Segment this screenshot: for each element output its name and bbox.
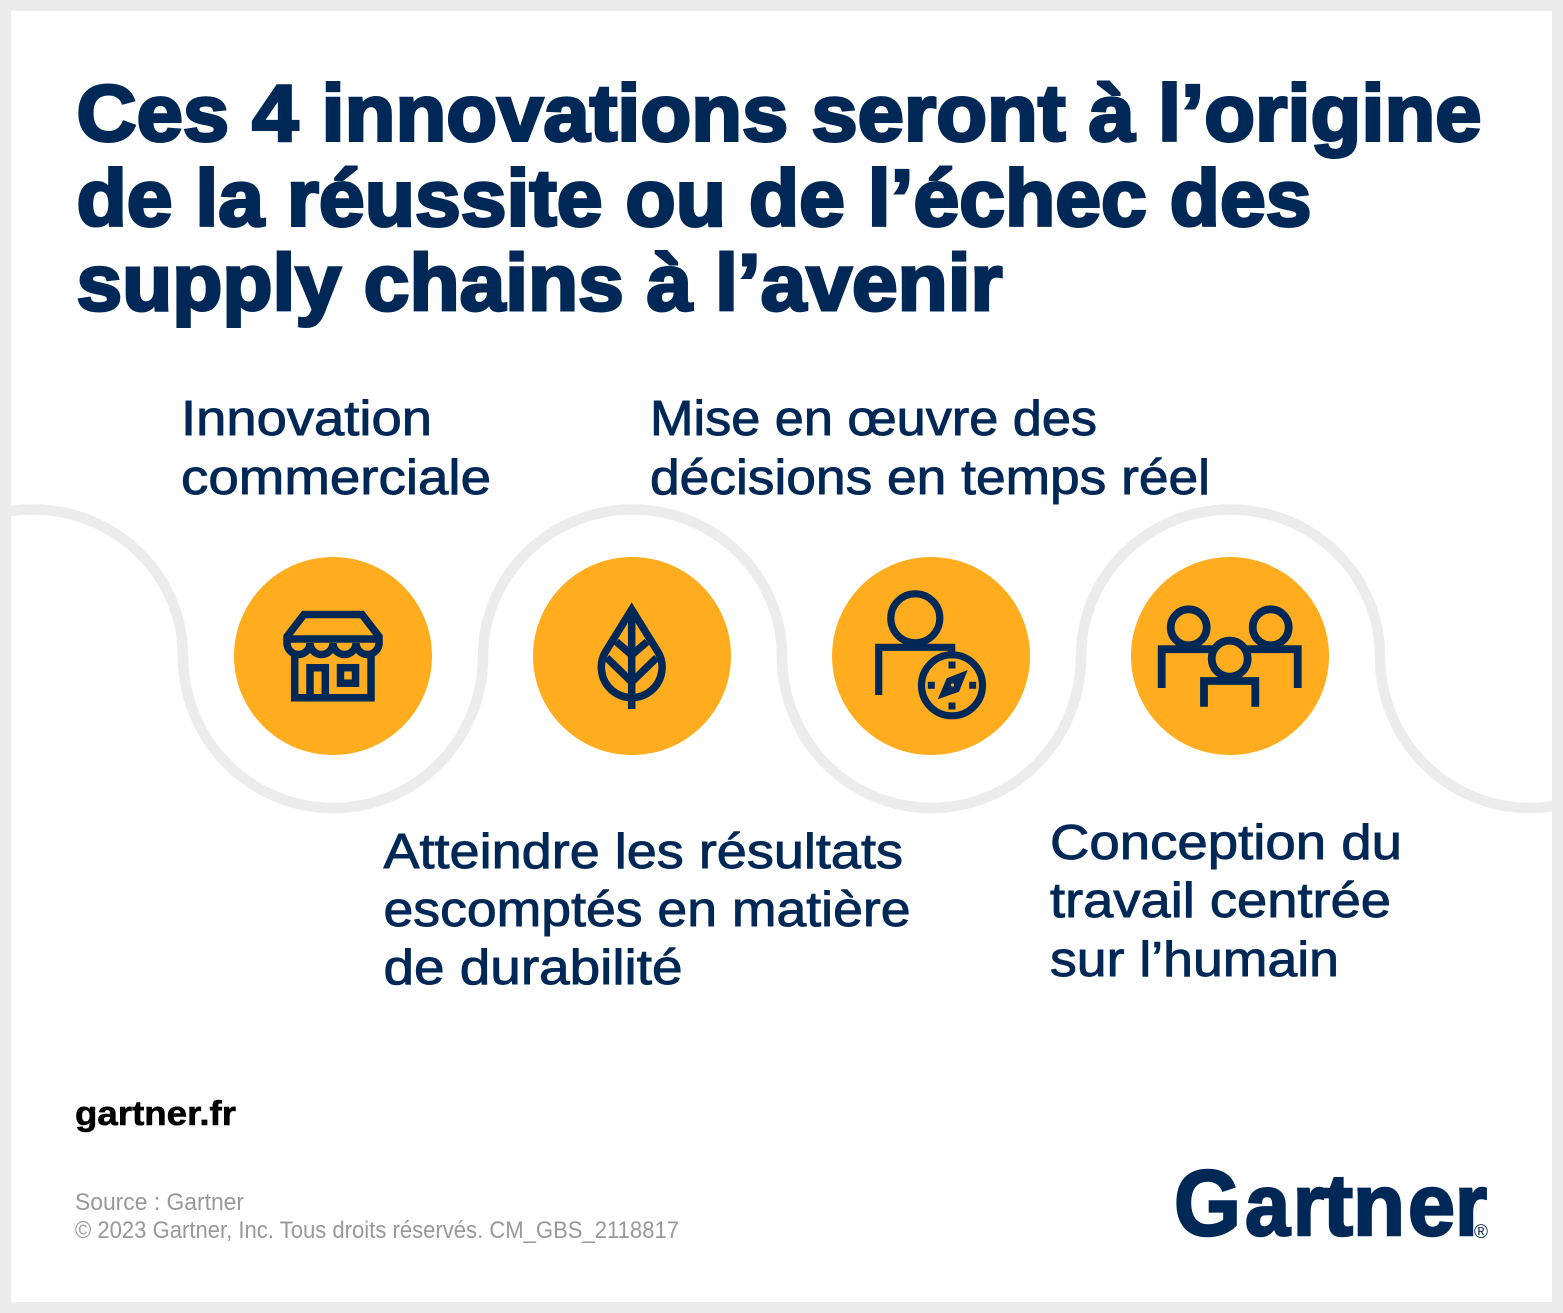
icon: three people <box>1131 557 1329 755</box>
label: conception du travail: travail centrée <box>1050 874 1391 928</box>
label: mise en oeuvre <box>650 392 1210 505</box>
source and copyright: © 2023 Gartner, Inc. Tous droits réservés. CM_GBS_2118817 <box>75 1217 679 1244</box>
label: durabilite: escomptés en matière <box>384 883 910 937</box>
icon: person with compass <box>832 557 1030 755</box>
Gartner logo: e <box>1408 1157 1455 1254</box>
label: conception du travail <box>1050 816 1402 987</box>
Gartner logo: t <box>1323 1157 1353 1254</box>
icon: store <box>234 557 432 755</box>
label: conception du travail: Conception du <box>1050 816 1402 870</box>
Gartner logo: r <box>1455 1157 1487 1254</box>
label: innovation commerciale <box>181 392 491 505</box>
title: supply chains à l’avenir <box>76 238 1002 327</box>
Gartner logo: ® <box>1474 1222 1488 1243</box>
label: durabilite <box>384 825 910 995</box>
title: de la réussite ou de l’échec des <box>76 154 1312 242</box>
Gartner logo: G <box>1174 1151 1241 1255</box>
Gartner logo: r <box>1293 1157 1324 1254</box>
wave connector <box>0 509 1563 808</box>
label: durabilite: de durabilité <box>384 941 682 995</box>
source and copyright <box>75 1189 679 1244</box>
label: durabilite: Atteindre les résultats <box>384 825 903 879</box>
label: conception du travail: sur l’humain <box>1050 933 1339 987</box>
Gartner logo: a <box>1245 1157 1291 1254</box>
label: innovation commerciale: commerciale <box>181 451 491 505</box>
title: Ces 4 innovations seront à l’origine <box>76 68 1481 158</box>
source and copyright: Source : Gartner <box>75 1189 244 1216</box>
title <box>76 68 1481 327</box>
label: innovation commerciale: Innovation <box>181 392 432 446</box>
label: mise en oeuvre: décisions en temps réel <box>650 451 1210 505</box>
Gartner logo <box>1174 1151 1488 1255</box>
icon: leaf <box>533 557 731 755</box>
website link: gartner.fr <box>75 1095 236 1133</box>
Gartner logo: n <box>1353 1157 1405 1254</box>
label: mise en oeuvre: Mise en œuvre des <box>650 392 1097 446</box>
